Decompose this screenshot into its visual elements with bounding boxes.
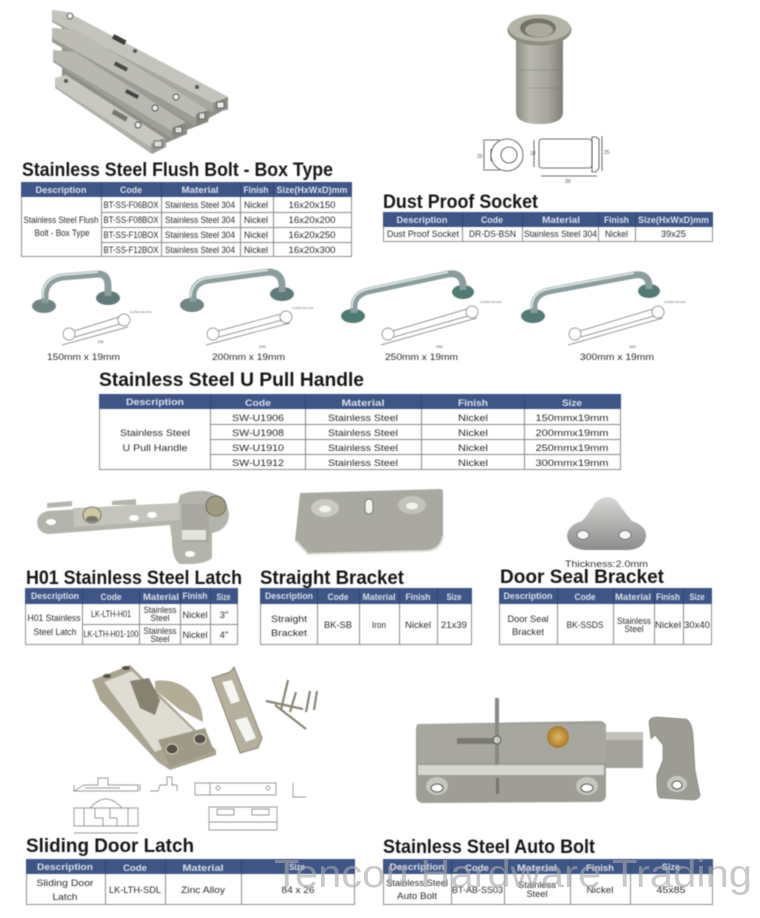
table: socket specs: Code [481,215,503,226]
table: u pull handle specs: U Pull Handle [122,443,188,454]
table: latch specs: Nickel [182,610,208,621]
table: bracket specs: Code [328,592,348,603]
technical drawing: socket dimensions [477,136,610,185]
table: flush bolt specs: Stainless Steel Flush [24,215,98,226]
table: socket specs: Description [396,215,448,226]
table: flush bolt specs: Nickel [244,230,268,241]
thickness note: Thickness:2.0mm [565,559,648,570]
heading: Stainless Steel Flush Bolt - Box Type [22,160,333,181]
table: auto bolt specs [383,859,713,905]
table: sliding latch specs: Description [37,862,93,873]
heading: Straight Bracket [260,568,405,589]
table: auto bolt specs: Stainless Steel [386,878,448,889]
technical drawing: latch dimensions [74,777,306,833]
table: flush bolt specs: Stainless Steel 304 [165,230,235,241]
handle 200mm [180,270,314,363]
table: bracket specs: Description [265,591,313,602]
table: u pull handle specs: Nickel [458,458,488,469]
panel: dust proof socket [383,14,713,242]
handle 200mm: 200mm x 19mm [212,352,285,363]
table: auto bolt specs: Auto Bolt [397,891,437,902]
table: flush bolt specs: 16x20x300 [288,245,336,256]
handle 300mm: 300 [629,344,636,349]
handle 150mm: GUIDE FILLING [130,310,152,314]
photo: bracket plate [295,489,443,554]
panel: straight bracket [260,489,472,644]
handle 200mm: GUIDE FILLING [292,306,314,310]
table: sliding latch specs: Material [182,863,224,874]
table: u pull handle specs: Code [245,398,271,409]
table: bracket specs: BK-SB [324,620,352,631]
table: door seal specs: 30x40 [684,620,710,631]
table: auto bolt specs: Size [662,862,680,873]
table: door seal specs: Door Seal [508,614,548,625]
table: bracket specs: Straight [271,614,307,625]
heading: Stainless Steel U Pull Handle [99,370,364,391]
table: u pull handle specs: 150mmx19mm [536,413,609,424]
table: u pull handle specs: Finish [458,398,488,409]
table: door seal specs: Bracket [512,627,544,638]
handle 300mm [521,273,686,363]
table: door seal specs [499,588,712,644]
table: u pull handle specs [99,394,621,470]
table: door seal specs: Material [615,592,651,603]
table: bracket specs: Size [446,592,462,603]
photo: bracket [567,497,646,550]
table: auto bolt specs: Code [465,863,489,874]
table: door seal specs: Finish [656,592,680,603]
table: auto bolt specs: Nickel [586,885,614,896]
table: auto bolt specs: Material [517,863,557,874]
table: latch specs: Nickel [182,630,208,641]
table: socket specs: DR-DS-BSN [469,229,516,240]
table: flush bolt specs: BT-SS-F06BOX [104,200,159,211]
table: u pull handle specs: Nickel [458,443,488,454]
table: socket specs: Dust Proof Socket [387,229,459,240]
table: u pull handle specs: Stainless Steel [328,413,398,424]
table: sliding latch specs: LK-LTH-SDL [109,885,161,896]
photo: latch [37,491,229,564]
table: flush bolt specs: Finish [244,185,269,196]
table: bracket specs: Iron [372,620,386,631]
table: door seal specs: Size [690,592,704,603]
table: u pull handle specs: Stainless Steel [328,443,398,454]
heading: Door Seal Bracket [500,567,665,588]
heading: Dust Proof Socket [383,192,539,213]
photo: latch, strike plate and screws [92,665,317,770]
table: socket specs: Size(HxWxD)mm [638,215,709,226]
table: latch specs: Finish [182,591,208,602]
table: socket specs: Nickel [605,229,628,240]
table: u pull handle specs: Description [126,397,184,408]
table: latch specs: Description [31,591,79,602]
table: u pull handle specs: Stainless Steel [328,428,398,439]
table: auto bolt specs: 45x85 [656,885,686,896]
table: latch specs: LK-LTH-H01 [91,609,131,620]
table: u pull handle specs: Material [342,398,384,409]
table: flush bolt specs [21,182,352,256]
table: flush bolt specs: Stainless Steel 304 [165,245,235,256]
table: latch specs: 4" [220,630,228,641]
table: flush bolt specs: Nickel [244,200,268,211]
table: flush bolt specs: 16x20x250 [288,230,336,241]
table: flush bolt specs: Stainless Steel 304 [165,200,235,211]
table: u pull handle specs: 200mmx19mm [536,428,609,439]
table: sliding latch specs: Size [289,862,305,873]
table: door seal specs: BK-SSDS [566,620,604,631]
table: latch specs: Stainless [144,626,177,637]
table: flush bolt specs: BT-SS-F10BOX [104,230,159,241]
heading: Stainless Steel Auto Bolt [383,837,596,858]
table: bracket specs: 21x39 [441,620,467,631]
table: u pull handle specs: SW-U1912 [232,458,284,469]
table: bracket specs [260,588,472,644]
table: auto bolt specs: Stainless [518,880,556,891]
table: flush bolt specs: BT-SS-F12BOX [104,245,159,256]
handle 300mm: GUIDE FILLING [664,300,686,304]
table: flush bolt specs: Bolt - Box Type [34,228,90,239]
table: latch specs: Size [216,592,230,603]
table: flush bolt specs: Stainless Steel 304 [165,215,235,226]
handle 250mm: GUIDE FILLING [480,300,502,304]
technical drawing: socket dimensions: 25 [477,154,483,160]
table: door seal specs: Description [504,591,553,602]
table: socket specs: Material [542,215,580,226]
table: flush bolt specs: Code [120,185,142,196]
table: u pull handle specs: Stainless Steel [120,428,190,439]
table: socket specs: Finish [604,215,629,226]
table: u pull handle specs: SW-U1908 [232,428,284,439]
heading: Sliding Door Latch [26,836,194,857]
table: u pull handle specs: Nickel [458,428,488,439]
table: auto bolt specs: BT-AB-SS03 [452,885,503,896]
table: socket specs [383,212,713,242]
table: door seal specs: Stainless [617,616,651,627]
table: bracket specs: Bracket [271,628,307,639]
table: flush bolt specs: Nickel [244,245,268,256]
table: auto bolt specs: Steel [526,889,548,900]
table: latch specs [25,588,238,645]
panel: stainless steel u pull handle [32,270,686,470]
table: bracket specs: Finish [406,592,431,603]
table: u pull handle specs: Stainless Steel [328,458,398,469]
panel: door seal bracket [499,497,712,644]
table: latch specs: Stainless [144,605,177,616]
handle 250mm [341,272,502,363]
panel: sliding door latch [26,665,355,905]
table: latch specs: Steel [150,634,170,645]
table: latch specs: Code [100,592,122,603]
table: u pull handle specs: 300mmx19mm [536,458,609,469]
table: u pull handle specs: SW-U1906 [232,413,284,424]
table: flush bolt specs: 16x20x150 [288,200,336,211]
table: latch specs: Steel Latch [34,627,76,638]
table: sliding latch specs: 84 x 26 [282,885,314,896]
handle 300mm: 300mm x 19mm [580,352,654,363]
panel: stainless steel auto bolt [383,698,713,905]
table: flush bolt specs: Material [182,185,218,196]
table: door seal specs: Nickel [655,620,681,631]
watermark: Tencon Hardware Trading [274,853,752,896]
table: u pull handle specs: SW-U1910 [232,443,284,454]
table: door seal specs: Steel [624,624,644,635]
table: flush bolt specs: 16x20x200 [288,215,336,226]
panel: stainless steel flush bolt box type [21,10,352,256]
photo: four flush bolts [52,10,228,154]
table: socket specs: 39x25 [661,229,686,240]
table: latch specs: Steel [150,613,170,624]
technical drawing: socket dimensions: 18 [530,151,536,157]
handle 150mm: 150mm x 19mm [47,352,120,363]
table: bracket specs: Nickel [405,620,431,631]
technical drawing: socket dimensions: 39 [565,179,571,185]
table: flush bolt specs: Size(HxWxD)mm [276,185,348,196]
table: latch specs: Material [143,592,179,603]
table: latch specs: LK-LTH-H01-100 [84,629,138,640]
handle 250mm: 250 [436,344,443,349]
table: sliding latch specs: Code [123,863,147,874]
table: door seal specs: Code [574,592,596,603]
table: auto bolt specs: Finish [586,863,614,874]
table: sliding latch specs: Zinc Alloy [181,885,225,896]
handle 150mm: 150 [97,339,104,344]
table: socket specs: Stainless Steel 304 [524,229,597,240]
table: flush bolt specs: BT-SS-F08BOX [104,215,159,226]
photo: socket cylinder [508,14,572,124]
table: u pull handle specs: 250mmx19mm [536,443,609,454]
table: latch specs: H01 Stainless [28,613,81,624]
table: latch specs: 3" [220,610,228,621]
table: sliding latch specs [26,859,355,905]
heading: H01 Stainless Steel Latch [26,568,242,589]
table: sliding latch specs: Latch [52,892,78,903]
handle 150mm [32,272,152,363]
photo: auto bolt and keeper [416,698,700,803]
panel: h01 stainless steel latch [25,491,242,645]
table: flush bolt specs: Nickel [244,215,268,226]
handle 200mm: 200 [259,344,266,349]
table: u pull handle specs: Nickel [458,413,488,424]
table: auto bolt specs: Description [390,862,445,873]
table: sliding latch specs: Sliding Door [36,878,94,889]
table: u pull handle specs: Size [562,398,582,409]
table: bracket specs: Material [362,592,396,603]
technical drawing: socket dimensions: 25 [604,150,610,156]
handle 250mm: 250mm x 19mm [385,352,458,363]
table: flush bolt specs: Description [36,185,87,196]
